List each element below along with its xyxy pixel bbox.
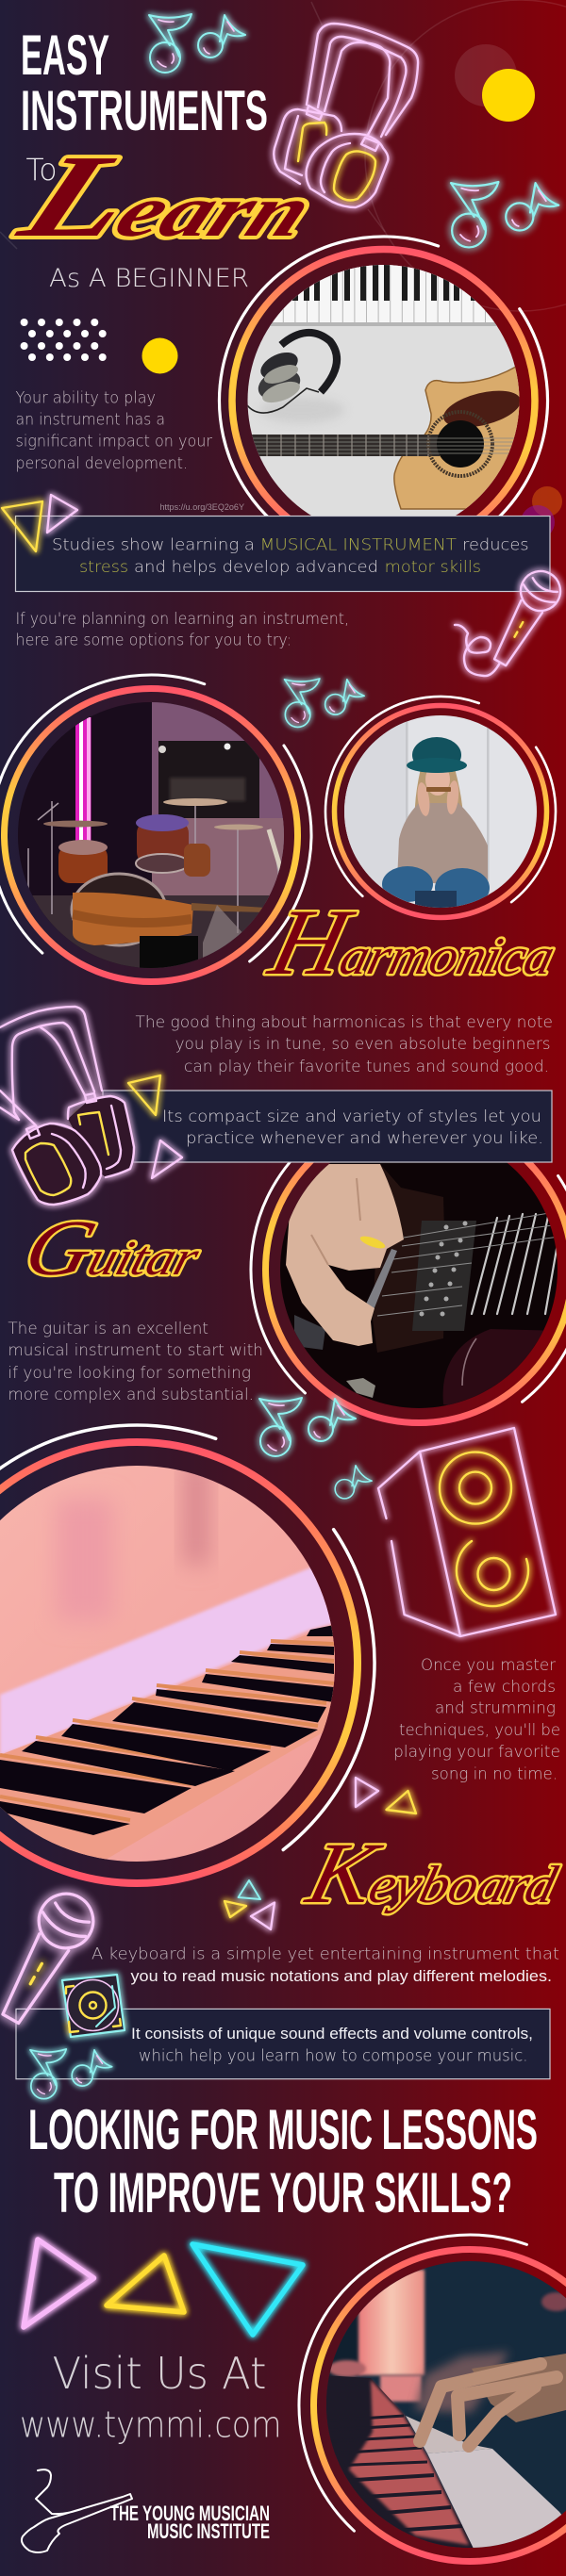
once you master text: song in no time. — [431, 1764, 558, 1783]
intro options text — [15, 610, 349, 650]
harmonica text: you play is in tune, so even absolute beginners — [175, 1035, 551, 1054]
logo: guitar and institute name — [22, 2469, 270, 2552]
photo: hand playing electric guitar — [280, 1163, 558, 1408]
ring: gradient guitar — [266, 1116, 566, 1423]
guitar text: more complex and substantial. — [8, 1386, 254, 1404]
ring: gradient harmonica — [334, 705, 547, 918]
ring: white arcs drums — [0, 613, 374, 1058]
icon: microphone left — [0, 1884, 103, 2032]
photo: piano, headphones and guitar — [247, 265, 519, 516]
panel: sound effects callout — [16, 2009, 550, 2079]
soft circle purple — [521, 505, 555, 539]
once you master text: techniques, you'll be — [399, 1721, 560, 1740]
icon: speaker — [378, 1428, 556, 1636]
icon: small triangles right — [356, 1778, 416, 1813]
guitar text — [8, 1320, 263, 1404]
ring: white arcs harmonica — [281, 652, 566, 971]
visit us at: Visit Us At — [53, 2348, 266, 2399]
ring: gradient — [232, 249, 535, 552]
icon: microphone with cable — [455, 564, 566, 676]
intro text: Your ability to play — [15, 388, 156, 407]
decorative soft rings — [0, 0, 566, 311]
soft circle orange — [532, 486, 562, 517]
title: Easy Instruments: EASY — [21, 24, 109, 87]
intro text — [15, 388, 212, 473]
guitar text: if you're looking for something — [8, 1364, 251, 1383]
panel: sound effects callout: It consists of unique sound effects and volume controls, — [131, 2025, 533, 2043]
photo: piano keys close up — [0, 1461, 340, 1866]
harmonica text — [136, 1013, 553, 1076]
ring: white arcs guitar — [186, 1037, 566, 1502]
keyboard text: you to read music notations and play different melodies. — [130, 1967, 552, 1985]
icon: music notes guitar section — [259, 1398, 372, 1499]
logo: guitar and institute name: THE YOUNG MUSICIAN — [110, 2502, 270, 2525]
once you master text: a few chords — [453, 1678, 556, 1697]
photo: hands on piano — [325, 2258, 566, 2551]
icon: neon triangles left — [2, 495, 77, 551]
keyboard text — [92, 1945, 559, 1985]
once you master text — [393, 1656, 560, 1783]
icon: music notes right — [451, 182, 558, 247]
ring: white arcs bottom — [233, 2169, 566, 2576]
intro text: an instrument has a — [15, 411, 165, 430]
panel: studies callout: Studies show learning a — [52, 536, 255, 555]
guitar text: musical instrument to start with — [8, 1341, 263, 1360]
heading: Harmonica: Harmonica — [259, 890, 566, 994]
heading: Guitar: Guitar — [16, 1205, 213, 1292]
panel: sound effects callout: which help you learn how to compose your music. — [139, 2046, 528, 2065]
panel: studies callout: stress — [79, 558, 128, 577]
heading: As A Beginner: As A BEGINNER — [49, 264, 249, 293]
ring: gradient drums — [4, 688, 298, 982]
panel: studies callout: MUSICAL INSTRUMENT — [260, 536, 458, 555]
intro text: significant impact on your — [15, 432, 212, 451]
heading: To: To — [26, 152, 57, 188]
icon: neon triangles callout — [128, 1075, 182, 1178]
dot pattern — [21, 319, 107, 361]
panel: compact size callout: practice whenever and wherever you like. — [186, 1129, 543, 1148]
yellow dot left — [142, 337, 177, 373]
panel: studies callout: reduces — [462, 536, 529, 555]
heading: call to action — [28, 2098, 538, 2224]
intro text: personal development. — [15, 454, 188, 473]
icon: headphones — [274, 24, 418, 207]
heading: Keyboard: Keyboard — [297, 1826, 566, 1922]
title: Easy Instruments — [21, 24, 268, 142]
panel: studies callout — [15, 517, 550, 592]
icon: headphones left — [0, 1007, 134, 1205]
yellow dot top right — [482, 69, 535, 122]
ring: white arcs keyboard — [0, 1333, 467, 1993]
website: www.tymmi.com — [20, 2404, 281, 2446]
guitar text: The guitar is an excellent — [8, 1320, 208, 1338]
soft circle top — [455, 44, 517, 107]
intro options text: here are some options for you to try: — [15, 632, 291, 650]
title: Easy Instruments: INSTRUMENTS — [21, 79, 268, 142]
panel: studies callout: motor skills — [385, 558, 481, 577]
once you master text: playing your favorite — [393, 1743, 560, 1762]
harmonica text: can play their favorite tunes and sound good. — [184, 1058, 549, 1076]
logo: guitar and institute name: MUSIC INSTITUTE — [147, 2519, 270, 2543]
icon: music notes top — [149, 14, 245, 73]
image credit: https://u.org/3EQ2o6Y — [160, 502, 244, 512]
heading: Learn script: Learn — [2, 131, 342, 262]
panel: compact size callout — [103, 1091, 552, 1162]
once you master text: and strumming — [435, 1698, 556, 1717]
intro options text: If you're planning on learning an instrument, — [15, 610, 349, 629]
icon: music notes bottom — [30, 2049, 112, 2099]
icon: large neon triangles — [24, 2240, 303, 2335]
icon: music notes center — [285, 679, 364, 727]
ring: gradient bottom — [313, 2249, 566, 2562]
keyboard text: A keyboard is a simple yet entertaining instrument that — [92, 1945, 559, 1964]
ring: white arcs — [156, 172, 566, 629]
photo: woman playing harmonica — [340, 712, 542, 914]
panel: compact size callout: Its compact size and variety of styles let you — [162, 1108, 541, 1126]
harmonica text: The good thing about harmonicas is that every note — [136, 1013, 553, 1032]
icon: turntable — [62, 1975, 125, 2037]
once you master text: Once you master — [421, 1656, 556, 1675]
panel: studies callout: and helps develop advanced — [134, 558, 378, 577]
icon: triangle cluster — [225, 1880, 275, 1929]
photo: drums and guitar — [18, 702, 284, 968]
ring: gradient keyboard — [0, 1442, 358, 1883]
